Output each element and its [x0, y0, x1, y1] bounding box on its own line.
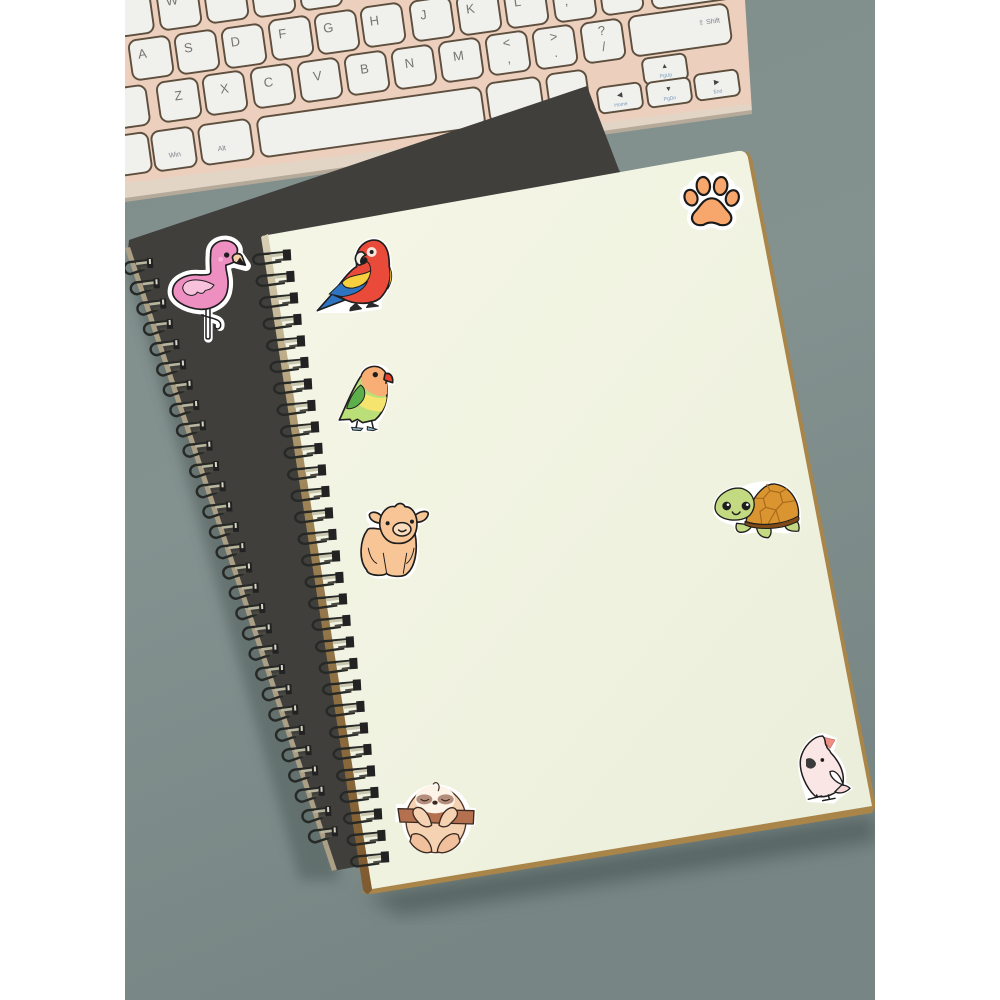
keys: bottom letter row: ,	[506, 51, 512, 66]
keys: bottom letter row: <	[502, 35, 511, 51]
keys: home row: K	[465, 1, 476, 17]
keys: bottom letter row: X	[219, 80, 230, 97]
keys: arrows: PgUp	[659, 72, 673, 80]
keys: home row: H	[369, 13, 380, 29]
keys: space row	[99, 69, 591, 178]
keys: arrows: ◀	[616, 92, 623, 99]
keys: bottom letter row: ⇧ Shift	[698, 16, 721, 27]
keyboard body	[125, 0, 752, 201]
keys: bottom letter row: V	[312, 68, 323, 84]
keys: top row	[107, 0, 732, 38]
keys: home row: F	[277, 26, 287, 42]
keys: arrows: ▶	[713, 79, 720, 86]
keyboard	[93, 0, 752, 202]
keys: home row: D	[230, 34, 241, 50]
keys: arrows: PgDn	[663, 95, 677, 103]
keys: bottom letter row	[93, 3, 732, 131]
black notebook	[125, 86, 620, 871]
keys: bottom letter row: Z	[173, 88, 183, 104]
sticker: lovebird	[339, 366, 393, 431]
notebook page	[262, 151, 872, 889]
keys: bottom letter row: M	[452, 48, 465, 64]
keys: home row: G	[322, 20, 334, 36]
keys: bottom letter row: .	[553, 45, 559, 60]
sticker: turtle	[715, 483, 799, 538]
sticker: paw print	[682, 176, 741, 225]
sticker: highland calf	[361, 503, 428, 577]
spine strip of black notebook	[125, 247, 337, 871]
keys: bottom letter row: /	[601, 39, 607, 54]
photo background	[93, 0, 880, 1000]
sticker: macaw	[317, 240, 392, 311]
keys: bottom letter row: ?	[597, 23, 606, 39]
spine strip of white notebook	[261, 234, 372, 894]
keys: home row: S	[183, 40, 194, 56]
keys: space row: Win	[168, 151, 181, 160]
keys: arrows: End	[713, 88, 723, 96]
keys: arrows: ▼	[665, 86, 673, 93]
white notebook	[253, 150, 876, 894]
sticker: cockatoo	[800, 735, 851, 802]
sticker: flamingo	[173, 241, 246, 339]
black cover	[128, 86, 620, 871]
keys: home row: J	[419, 7, 428, 23]
keys: bottom letter row: N	[404, 55, 415, 71]
keys: home row: A	[137, 46, 148, 62]
rings of white notebook	[253, 249, 389, 867]
keys: bottom letter row: >	[549, 29, 558, 45]
rings of black notebook	[124, 258, 338, 843]
keys: bottom letter row: B	[359, 61, 370, 77]
keys: arrows: ▲	[661, 63, 669, 70]
keys: arrows: Home	[614, 101, 628, 109]
keys: bottom letter row: C	[263, 74, 274, 90]
notebook edge	[362, 150, 876, 894]
shadow under black notebook	[125, 260, 340, 880]
shadow under white notebook	[365, 815, 880, 915]
keys: home row	[128, 0, 644, 81]
keys: arrows	[596, 53, 741, 114]
keys: space row: Alt	[217, 145, 227, 153]
sticker: sloth	[395, 783, 476, 854]
